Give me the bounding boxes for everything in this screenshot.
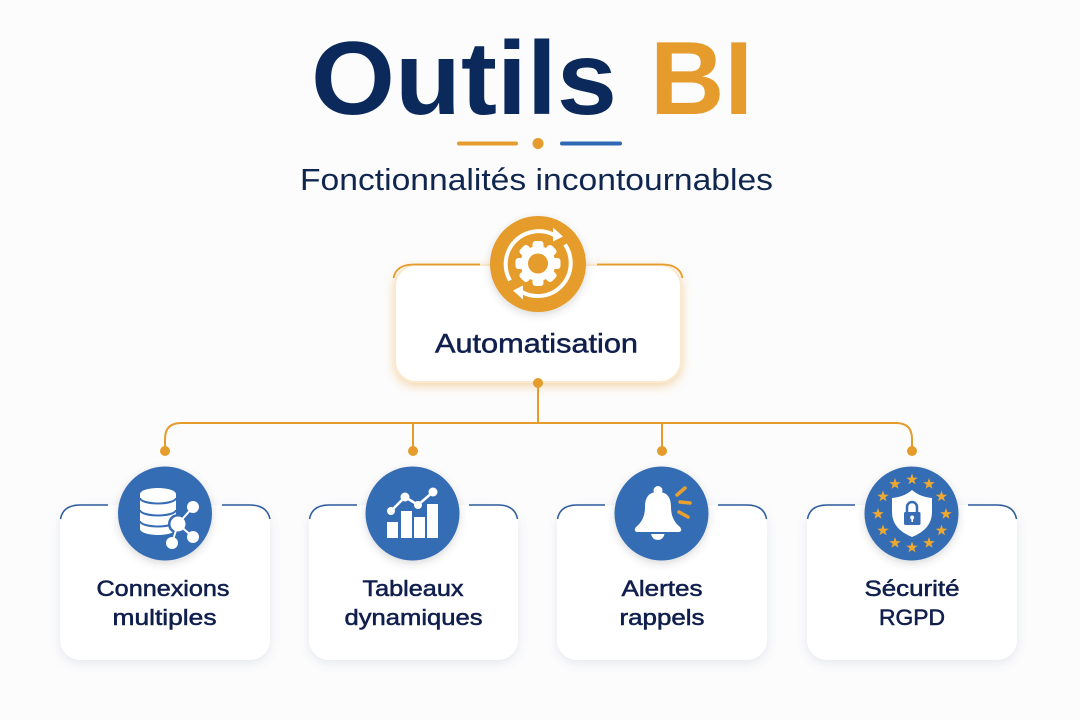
connector tree xyxy=(160,378,917,456)
title: Outils xyxy=(311,21,617,137)
card top accent xyxy=(310,505,518,519)
icon: shield with lock and stars xyxy=(864,466,958,560)
card label xyxy=(96,576,230,630)
panel: tableaux dynamiques xyxy=(309,466,518,660)
card label: rappels xyxy=(620,605,704,630)
card label xyxy=(620,576,704,630)
card top accent xyxy=(394,264,682,278)
card top accent xyxy=(558,505,766,519)
card label: Automatisation xyxy=(435,328,638,358)
card label: Sécurité xyxy=(864,576,960,601)
panel: connexions multiples xyxy=(60,466,270,660)
card background xyxy=(60,505,270,660)
title divider xyxy=(459,138,620,149)
card label: RGPD xyxy=(879,605,945,630)
card background xyxy=(309,505,518,660)
card top accent xyxy=(60,505,270,519)
panel: securite rgpd xyxy=(807,466,1017,660)
card label: Tableaux xyxy=(362,576,464,601)
subtitle: Fonctionnalités incontournables xyxy=(300,163,773,197)
icon: bell xyxy=(614,466,708,560)
card label: dynamiques xyxy=(344,605,482,630)
card top accent xyxy=(808,505,1016,519)
title: BI xyxy=(650,21,753,137)
card label: multiples xyxy=(112,605,216,630)
card label: Alertes xyxy=(622,576,702,601)
panel: alertes rappels xyxy=(557,466,767,660)
icon: bar and line chart xyxy=(366,466,460,560)
title xyxy=(311,21,753,137)
panel: automatisation xyxy=(394,216,682,382)
card background xyxy=(807,505,1017,660)
icon: database network xyxy=(118,466,212,560)
card label: Connexions xyxy=(96,576,230,601)
card background xyxy=(395,265,681,382)
card label xyxy=(344,576,482,630)
icon: gear with rotating arrows xyxy=(490,216,586,312)
card label xyxy=(864,576,960,630)
card background xyxy=(557,505,767,660)
